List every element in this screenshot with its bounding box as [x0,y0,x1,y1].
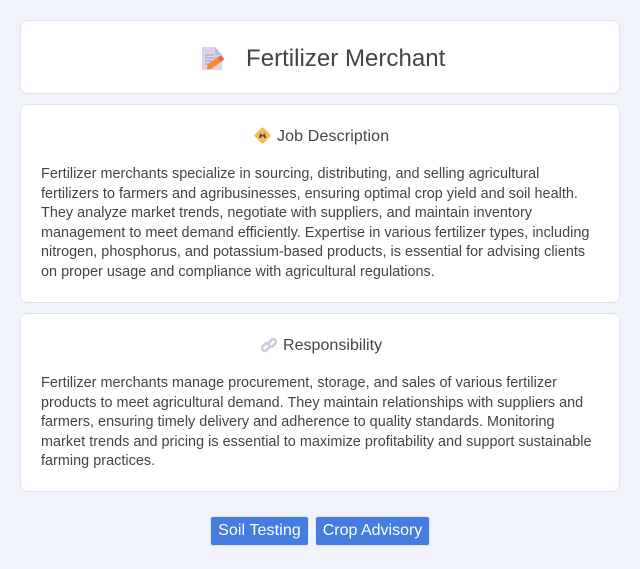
responsibility text: farming practices. [41,453,155,469]
responsibility text: market trends and pricing is essential to maximize profitability and support sustainable [41,434,592,450]
job description text: on proper usage and compliance with agricultural regulations. [41,264,435,280]
job description text: fertilizers to farmers and agribusinesses, ensuring optimal crop yield and soil health. [41,186,578,202]
icon: construction diamond [254,128,270,144]
title card [20,20,620,94]
responsibility heading: Responsibility [283,337,382,354]
job description text: nitrogen, phosphorus, and potassium-based products, is essential for advising clients [41,244,585,260]
responsibility text [41,375,592,469]
icon: link [261,338,277,352]
panel: job description [20,104,620,303]
job description heading: Job Description [277,128,389,145]
job description text [41,166,589,280]
panel: responsibility [20,313,620,492]
title: Fertilizer Merchant [246,45,445,72]
responsibility text: products to meet agricultural demand. They maintain relationships with suppliers and [41,394,583,410]
job description text: Fertilizer merchants specialize in sourcing, distributing, and selling agricultural [41,166,539,182]
icon: document with pencil [202,47,224,70]
job description text: They analyze market trends, negotiate with suppliers, and maintain inventory [41,205,532,221]
tag: crop advisory: Crop Advisory [323,522,422,539]
responsibility text: Fertilizer merchants manage procurement, storage, and sales of various fertilizer [41,375,557,391]
job description text: management to meet demand efficiently. Expertise in various fertilizer types, including [41,224,589,240]
tag: soil testing: Soil Testing [218,522,301,539]
tag: crop advisory [315,516,430,546]
tag: soil testing [210,516,309,546]
responsibility text: farmers, ensuring timely delivery and adherence to quality standards. Monitoring [41,414,555,430]
